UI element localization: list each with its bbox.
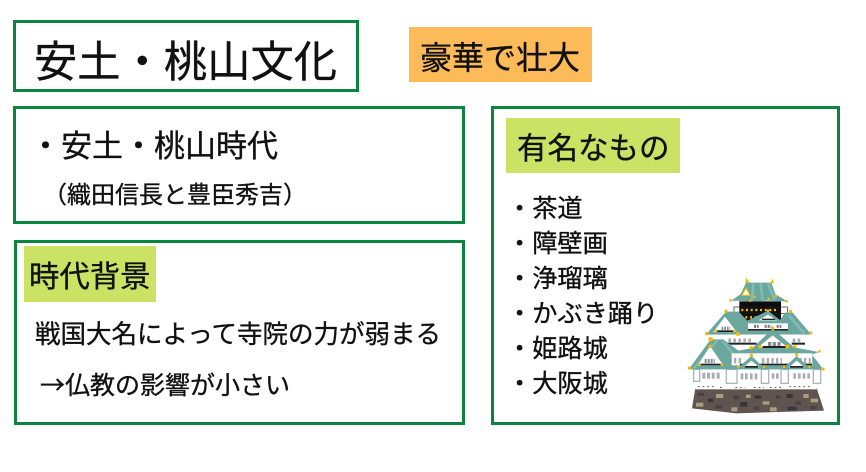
list of famous things	[507, 189, 658, 400]
lower roof	[689, 329, 823, 369]
heading text: famous things: 有名なもの	[517, 124, 670, 168]
title box	[13, 20, 359, 92]
callout: gorgeous and grand	[409, 27, 592, 82]
lower roof wall and gables	[698, 335, 812, 368]
heading text: historical background: 時代背景	[29, 252, 151, 296]
windows	[702, 373, 810, 379]
list of famous things: ・姫路城	[507, 329, 608, 365]
title: 安土・桃山文化	[34, 28, 337, 90]
list of famous things: ・茶道	[507, 189, 583, 225]
second storey wall	[725, 335, 805, 345]
wall buttresses	[694, 369, 821, 383]
white lower wall	[695, 369, 817, 389]
heading: famous things	[506, 118, 680, 173]
wall dots	[698, 387, 813, 388]
panel: famous things	[491, 106, 840, 425]
gold roof ornaments	[688, 277, 825, 371]
top storey black wall with gold	[734, 301, 787, 325]
panel: period	[13, 106, 465, 224]
panel: historical background	[14, 240, 465, 425]
top gable	[742, 288, 750, 295]
background text line 2: →仏教の影響が小さい	[40, 366, 290, 402]
background text line 1: 戦国大名によって寺院の力が弱まる	[35, 314, 441, 351]
period rulers: （織田信長と豊臣秀吉）	[43, 175, 307, 210]
period name: ・安土・桃山時代	[30, 121, 278, 166]
list of famous things: ・かぶき踊り	[507, 294, 658, 330]
top roof	[731, 283, 787, 301]
list of famous things: ・浄瑠璃	[507, 259, 608, 295]
list of famous things: ・障壁画	[507, 224, 608, 260]
third tier roof	[706, 311, 811, 335]
icon: castle illustration	[688, 278, 825, 414]
heading: historical background	[24, 246, 156, 302]
list of famous things: ・大阪城	[507, 364, 608, 400]
callout text: 豪華で壮大	[420, 33, 580, 79]
stone base	[692, 388, 824, 413]
third tier gables	[713, 315, 788, 332]
